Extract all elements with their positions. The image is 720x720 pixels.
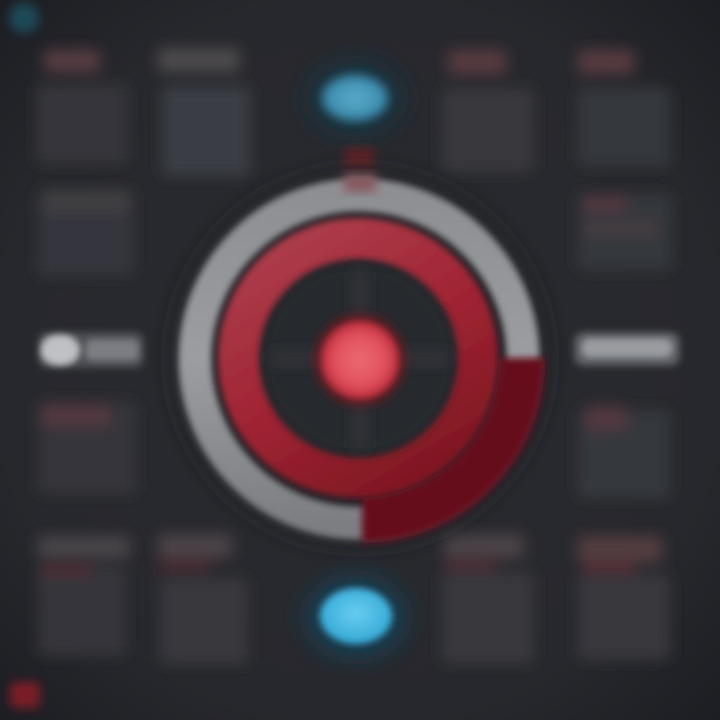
panel: top-right card 1 [442, 50, 534, 172]
icon: bottom blue oval [306, 577, 406, 657]
panel: upper-left middle card [38, 190, 134, 276]
panel: upper-right middle card [578, 194, 672, 270]
spokes [272, 272, 448, 448]
icon: top-left teal dot [9, 3, 39, 33]
panel: bottom-right card 1 [442, 534, 534, 664]
panel: top-left card 1 [36, 50, 128, 164]
panel: top-left card 2 [158, 48, 250, 176]
label: right white pill [574, 332, 680, 366]
inner dark disc [263, 263, 455, 455]
middle red ring [239, 239, 477, 477]
panel: lower-left middle card [38, 402, 136, 494]
chart: concentric ring diagram [174, 172, 546, 544]
label: left white pill [38, 332, 144, 368]
panel: top-right card 2 [578, 50, 670, 166]
panel: lower-right middle card [578, 406, 670, 498]
top red ring tick [344, 174, 376, 192]
panel: bottom-left card 2 [158, 534, 248, 664]
icon: bottom-left red square [10, 682, 40, 708]
arrow: red marker above ring [344, 148, 374, 170]
outer gray ring [195, 195, 523, 523]
panel: bottom-right card 2 [578, 536, 670, 660]
outer ring dark red segment [362, 358, 522, 520]
center red circle [314, 314, 406, 406]
icon: top blue oval [309, 62, 401, 134]
shadow behind ring [174, 172, 546, 544]
panel: bottom-left card 1 [38, 536, 130, 656]
